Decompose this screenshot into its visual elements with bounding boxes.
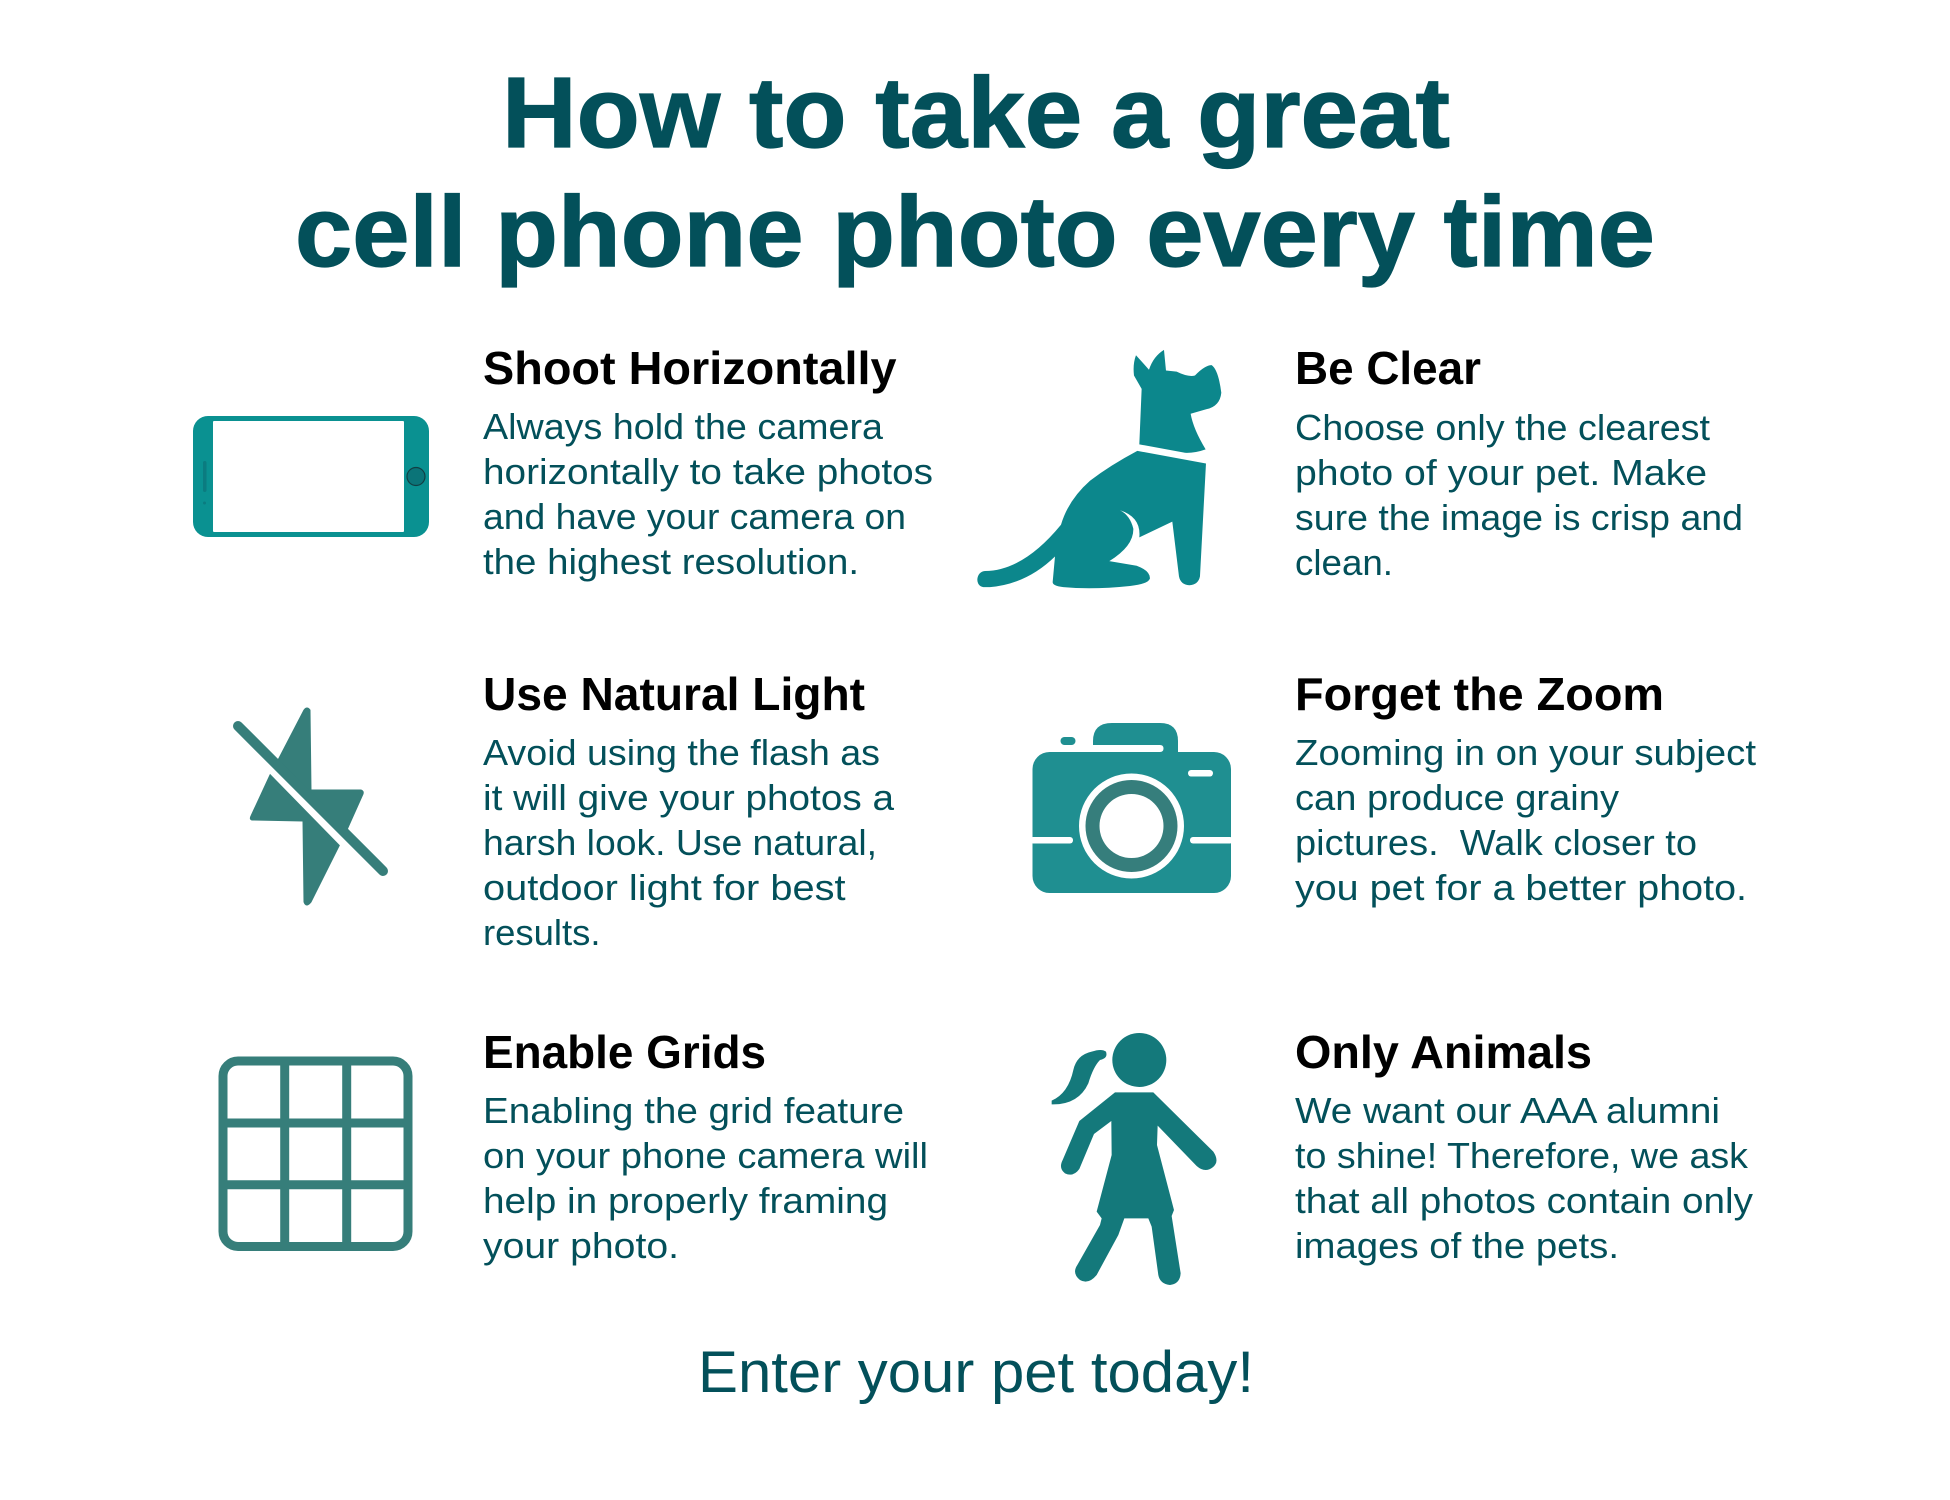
heading: forget the zoom: Forget the Zoom [1295,668,1664,720]
title: cell phone photo every time [295,176,1655,288]
text: shoot horizontally [483,406,933,582]
text: enable grids: help in properly framing [483,1180,888,1221]
text: shoot horizontally: and have your camera on [483,496,906,537]
heading: shoot horizontally: Shoot Horizontally [483,342,897,394]
text: shoot horizontally: Always hold the camera [483,406,884,447]
text: use natural light: outdoor light for best [483,867,846,908]
heading: only animals: Only Animals [1295,1026,1592,1078]
text: shoot horizontally: the highest resolution. [483,541,859,582]
heading: be clear: Be Clear [1295,342,1481,394]
icon: camera [1030,723,1233,893]
panel: be clear [977,342,1743,588]
text: forget the zoom: Zooming in on your subject [1295,732,1756,773]
text: enable grids: on your phone camera will [483,1135,928,1176]
text: only animals: that all photos contain only [1295,1180,1754,1221]
title [295,57,1655,288]
panel: shoot horizontally [193,342,933,582]
heading: enable grids: Enable Grids [483,1026,766,1078]
text: enable grids: Enabling the grid feature [483,1090,904,1131]
panel: forget the zoom [1030,668,1756,908]
text: use natural light: results. [483,912,600,953]
text: use natural light: it will give your photos a [483,777,895,818]
text: enable grids: your photo. [483,1225,679,1266]
text: forget the zoom: pictures. Walk closer to [1295,822,1697,863]
text: only animals: images of the pets. [1295,1225,1619,1266]
text: forget the zoom: you pet for a better photo. [1295,867,1747,908]
text: enable grids [483,1090,928,1266]
text: forget the zoom: can produce grainy [1295,777,1620,818]
text: be clear: sure the image is crisp and [1295,497,1743,538]
panel: enable grids [223,1026,928,1266]
text: shoot horizontally: horizontally to take photos [483,451,933,492]
text: use natural light: Avoid using the flash as [483,732,880,773]
panel: use natural light [238,668,895,953]
icon: girl walking [1052,1033,1216,1285]
call to action: Enter your pet today! [698,1340,1254,1405]
heading: use natural light: Use Natural Light [483,668,865,720]
text: forget the zoom [1295,732,1756,908]
icon: horizontal phone [193,416,429,537]
title: How to take a great [502,57,1450,169]
text: only animals [1295,1090,1754,1266]
panel: only animals [1052,1026,1754,1285]
icon: grid [223,1061,408,1246]
text: be clear [1295,407,1743,583]
icon: sitting dog [977,350,1221,588]
text: be clear: Choose only the clearest [1295,407,1710,448]
text: use natural light: harsh look. Use natural, [483,822,877,863]
text: only animals: We want our AAA alumni [1295,1090,1720,1131]
icon: flash off [238,708,383,905]
text: be clear: photo of your pet. Make [1295,452,1707,493]
text: use natural light [483,732,895,953]
text: only animals: to shine! Therefore, we ask [1295,1135,1749,1176]
text: be clear: clean. [1295,542,1393,583]
